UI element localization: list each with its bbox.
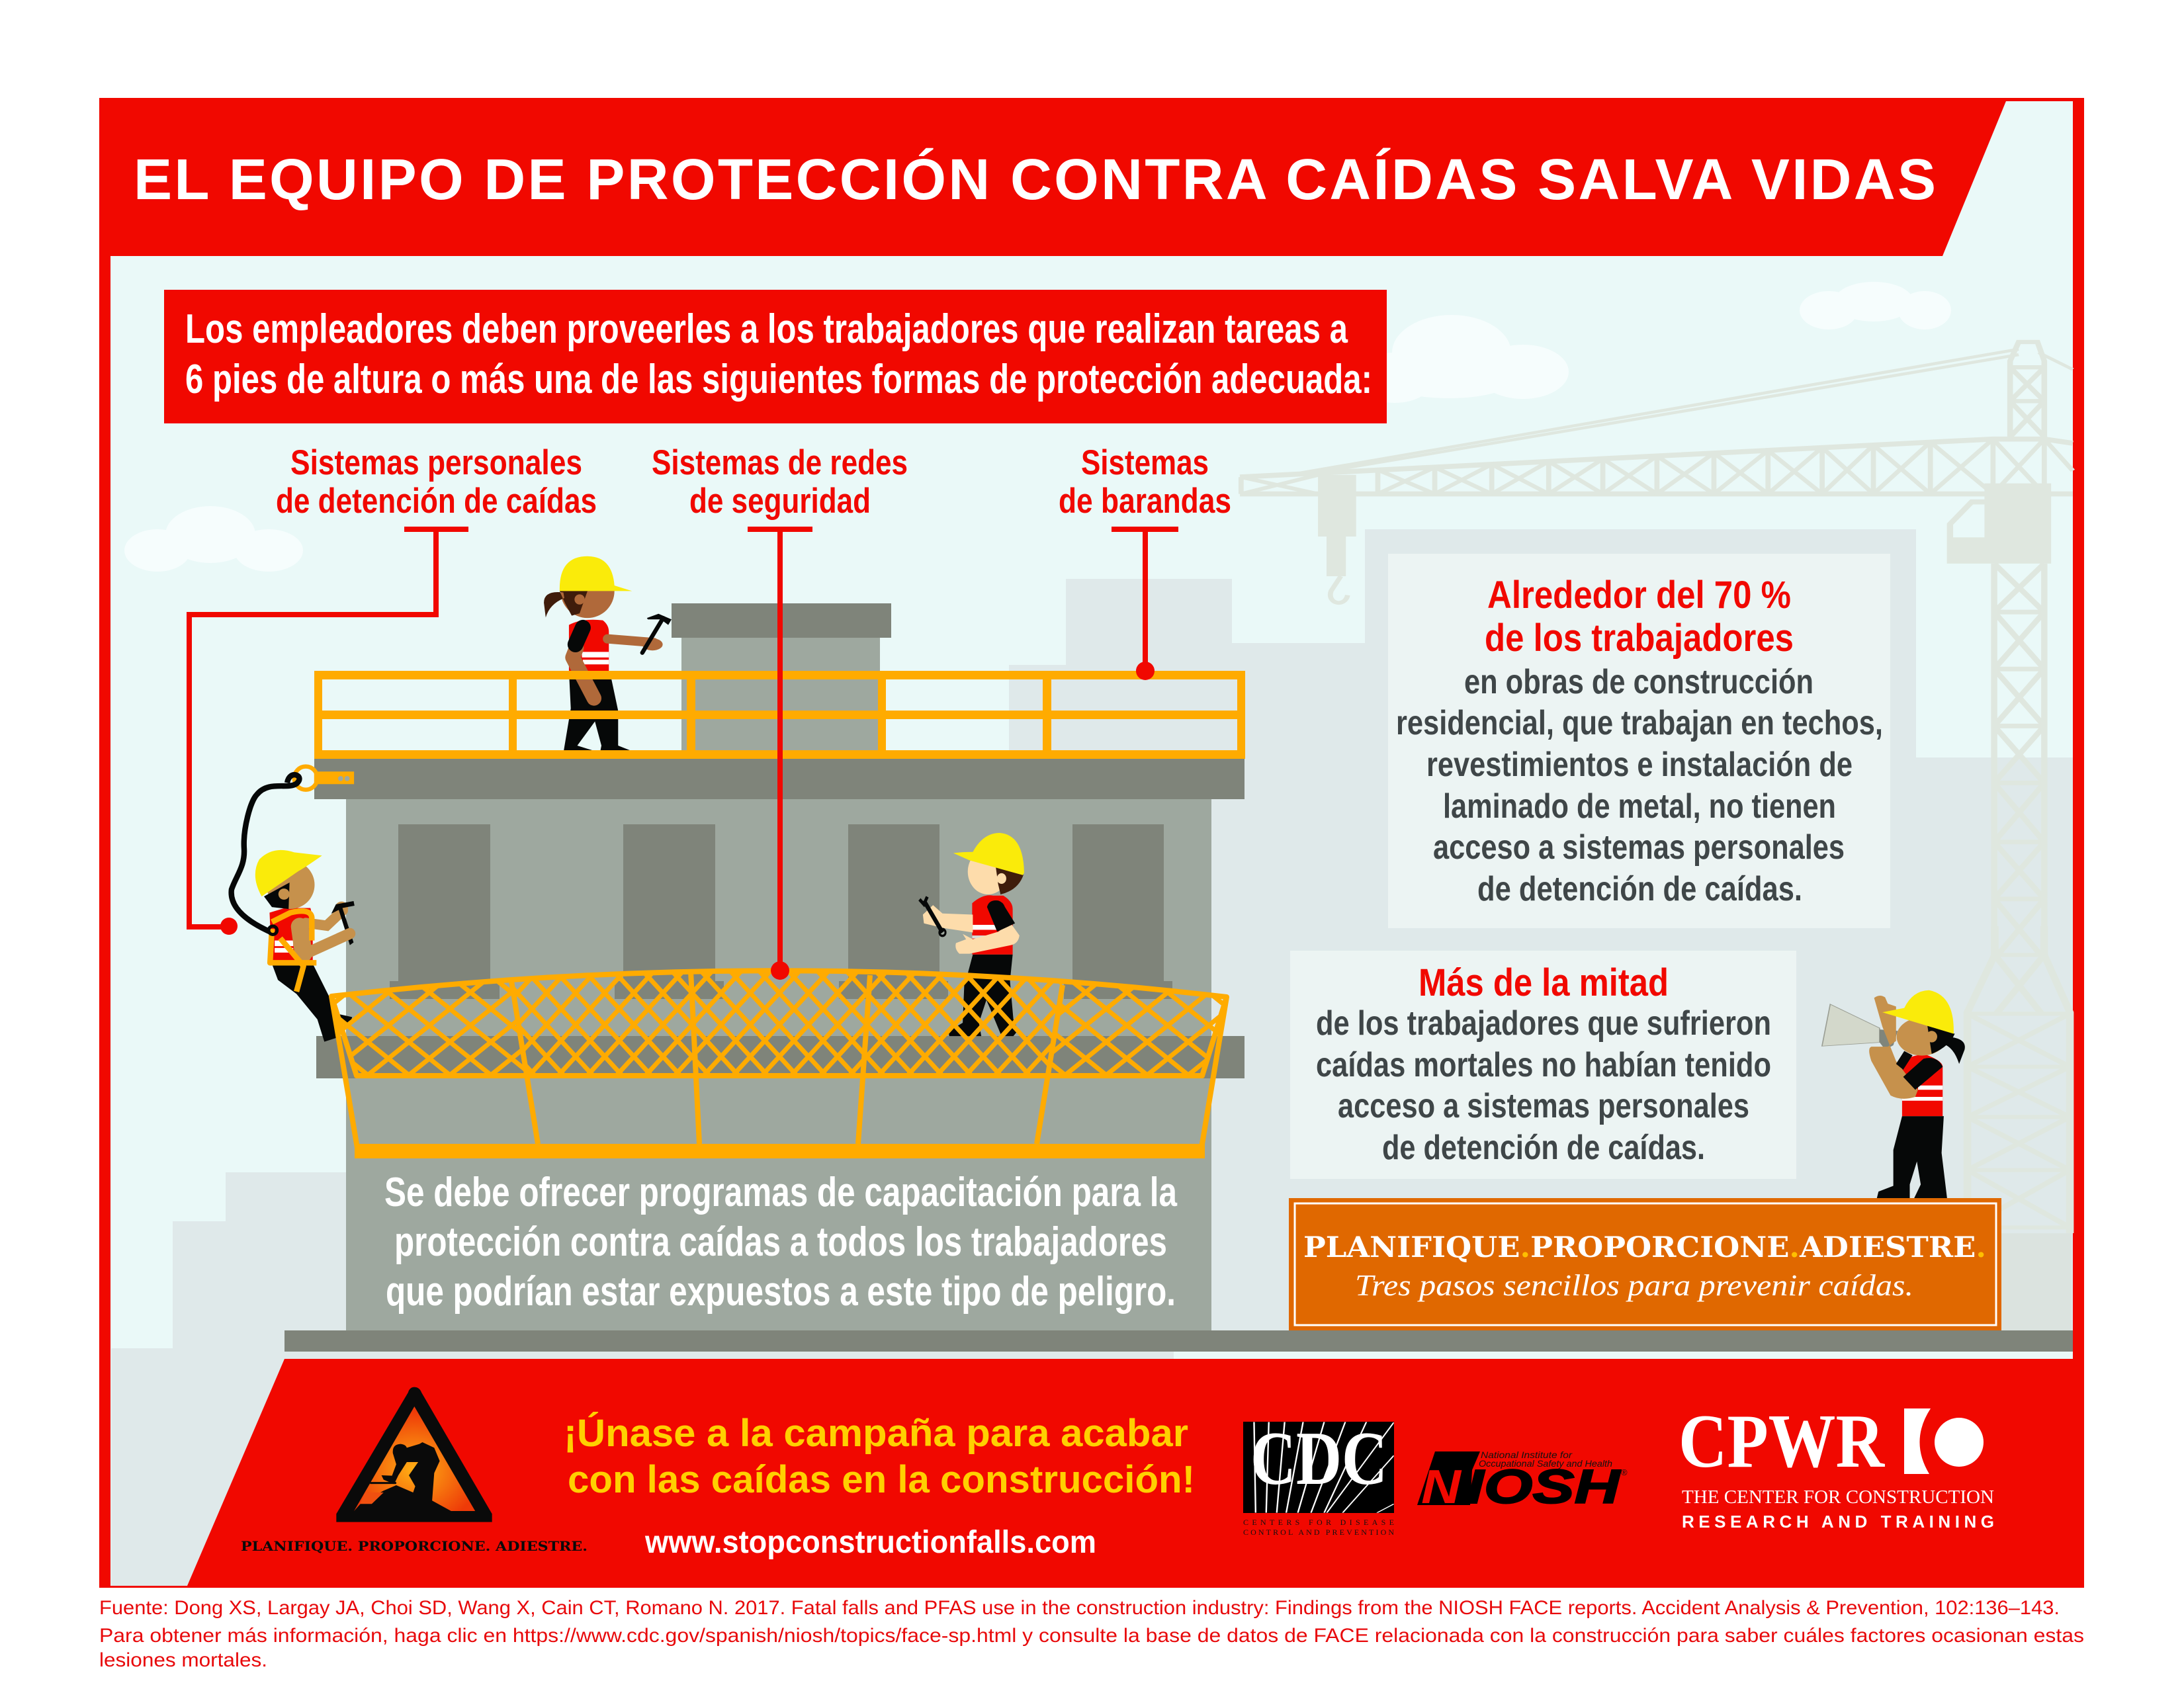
label: personal fall arrest systems: de detención de caídas bbox=[276, 482, 597, 521]
text: training requirement: protección contra caídas a todos los trabajadores bbox=[394, 1219, 1167, 1265]
logo: NIOSH: ® bbox=[1621, 1467, 1628, 1477]
panel: more than half statistic: de los trabajadores que sufrieron bbox=[1316, 1004, 1771, 1043]
text: training requirement bbox=[384, 1170, 1177, 1315]
callout: plan provide train: Tres pasos sencillos para prevenir caídas. bbox=[1355, 1268, 1913, 1302]
logo: CPWR bbox=[1679, 1399, 1994, 1532]
callout: employer requirement: 6 pies de altura o más una de las siguientes formas de protección adecuada: bbox=[185, 357, 1372, 402]
logo: NIOSH: NIOSH bbox=[1421, 1461, 1622, 1514]
panel: 70 percent statistic: de detención de caídas. bbox=[1477, 870, 1802, 908]
panel: campaign footer band bbox=[99, 1359, 2084, 1588]
header: title banner bbox=[99, 98, 2007, 256]
illustration: building bbox=[314, 603, 1245, 1330]
panel: more than half statistic: Más de la mitad bbox=[1419, 961, 1669, 1004]
panel: 70 percent statistic: Alrededor del 70 % bbox=[1487, 574, 1791, 617]
logo: NIOSH: N bbox=[1421, 1461, 1462, 1514]
panel: 70 percent statistic: residencial, que trabajan en techos, bbox=[1396, 704, 1883, 742]
panel: 70 percent statistic: revestimientos e instalación de bbox=[1426, 746, 1853, 784]
text: source note: lesiones mortales. bbox=[99, 1649, 267, 1671]
panel: 70 percent statistic: de los trabajadores bbox=[1485, 617, 1794, 660]
callout: plan provide train bbox=[1289, 1198, 2001, 1330]
illustration: ground slab bbox=[284, 1330, 2073, 1352]
callout: employer requirement bbox=[164, 290, 1387, 423]
text: source note bbox=[99, 1597, 2084, 1671]
background: tower crane bbox=[1240, 342, 2073, 1331]
connector: personal fall arrest label bbox=[189, 443, 597, 935]
label: personal fall arrest systems bbox=[276, 443, 597, 521]
logo: CPWR: CPWR bbox=[1679, 1399, 1886, 1483]
label: safety net systems bbox=[652, 443, 908, 521]
logo: CPWR: RESEARCH AND TRAINING bbox=[1682, 1512, 1994, 1532]
label: guardrail systems bbox=[1059, 443, 1231, 521]
text: source note: Para obtener más información, haga clic en https://www.cdc.gov/spanish/niosh/topics/face-sp.html y consulte la base de datos de FACE relacionada con la construcción para saber cuáles factores ocasionan estas bbox=[99, 1625, 2084, 1647]
worker: worker with wrench bbox=[920, 833, 1024, 1036]
text: campaign call to action bbox=[564, 1412, 1195, 1501]
logo: NIOSH: National Institute for bbox=[1481, 1449, 1573, 1460]
callout: plan provide train: PLANIFIQUE .PROPORCIONE .ADIESTRE . bbox=[1303, 1231, 1986, 1264]
logo: NIOSH bbox=[1417, 1449, 1628, 1514]
panel: 70 percent statistic: laminado de metal, no tienen bbox=[1443, 787, 1836, 826]
label: guardrail systems: de barandas bbox=[1059, 482, 1231, 521]
logo: CDC: CDC bbox=[1250, 1416, 1387, 1500]
background: skyline buildings bbox=[111, 529, 2073, 1586]
connector: guardrail label bbox=[1059, 443, 1231, 680]
worker: harnessed worker with lanyard bbox=[232, 767, 355, 1042]
title: EL EQUIPO DE PROTECCIÓN CONTRA CAÍDAS SALVA VIDAS bbox=[134, 148, 1936, 212]
icon: warning triangle with worker bbox=[336, 1387, 492, 1522]
text: training requirement: que podrían estar expuestos a este tipo de peligro. bbox=[386, 1269, 1176, 1315]
connector: safety net label bbox=[652, 443, 908, 980]
logo: CPWR: THE CENTER FOR CONSTRUCTION bbox=[1682, 1487, 1994, 1508]
panel: 70 percent statistic: acceso a sistemas personales bbox=[1433, 828, 1845, 867]
label: safety net systems: Sistemas de redes bbox=[652, 443, 908, 482]
logo: NIOSH: Occupational Safety and Health bbox=[1479, 1458, 1612, 1469]
text: campaign url: www.stopconstructionfalls.com bbox=[644, 1525, 1096, 1560]
logo: CDC bbox=[1243, 1416, 1394, 1537]
illustration: guardrail system bbox=[314, 671, 1245, 759]
panel: more than half statistic: acceso a sistemas personales bbox=[1338, 1087, 1749, 1125]
panel: more than half statistic: caídas mortales no habían tenido bbox=[1316, 1046, 1771, 1084]
callout: employer requirement: Los empleadores deben proveerles a los trabajadores que realizan tareas a bbox=[185, 306, 1348, 352]
label: safety net systems: de seguridad bbox=[689, 482, 871, 521]
text: slogan small: PLANIFIQUE. PROPORCIONE. ADIESTRE. bbox=[241, 1538, 588, 1554]
worker: roof worker with hammer bbox=[544, 556, 672, 750]
illustration: safety net system bbox=[331, 971, 1227, 1158]
text: campaign call to action: con las caídas en la construcción! bbox=[568, 1458, 1195, 1501]
panel: more than half statistic bbox=[1290, 951, 1796, 1179]
panel: more than half statistic: de detención de caídas. bbox=[1382, 1129, 1705, 1167]
label: guardrail systems: Sistemas bbox=[1081, 443, 1209, 482]
panel: 70 percent statistic: en obras de construcción bbox=[1464, 663, 1813, 701]
panel: 70 percent statistic bbox=[1388, 554, 1890, 928]
label: personal fall arrest systems: Sistemas personales bbox=[290, 443, 582, 482]
logo: CDC: CENTERS FOR DISEASE bbox=[1243, 1518, 1394, 1527]
text: source note: Fuente: Dong XS, Largay JA, Choi SD, Wang X, Cain CT, Romano N. 2017. Fatal falls and PFAS use in the construction industry: Findings from the NIOSH FACE reports. Accident Analysis & Prevention, 102:136–143. bbox=[99, 1597, 2060, 1619]
text: training requirement: Se debe ofrecer programas de capacitación para la bbox=[384, 1170, 1177, 1215]
text: campaign call to action: ¡Únase a la campaña para acabar bbox=[564, 1412, 1188, 1455]
background: clouds bbox=[124, 282, 1951, 572]
logo: CDC: CONTROL AND PREVENTION bbox=[1243, 1528, 1394, 1537]
worker: worker with megaphone bbox=[1822, 990, 1965, 1198]
